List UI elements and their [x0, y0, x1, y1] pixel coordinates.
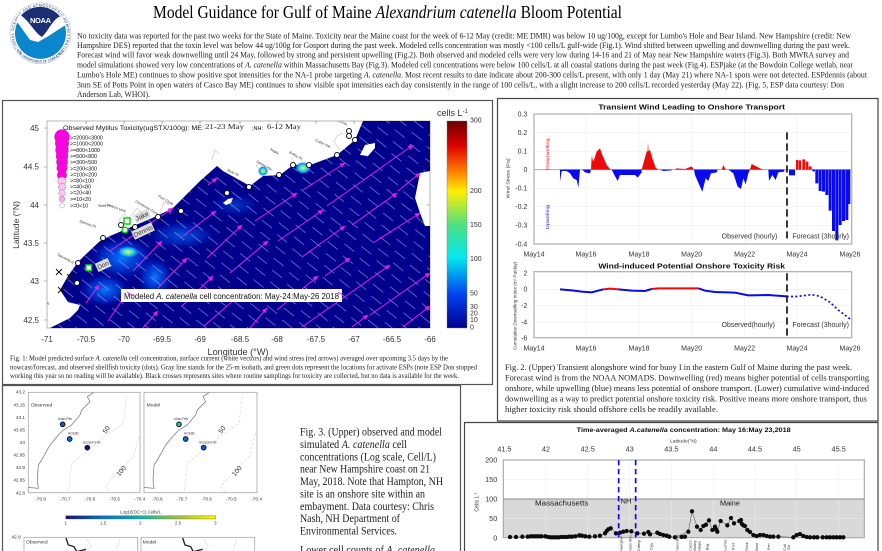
station labels: Gleason Cove	[326, 113, 348, 127]
chart: cumulative toxicity risk: May22	[734, 346, 755, 353]
routine sampling crosses	[56, 269, 73, 293]
legend: mussel toxicity: >=500<800	[70, 154, 97, 160]
lower maps: Model	[143, 539, 156, 545]
log colorbar: 2.5	[175, 520, 182, 525]
y axis labels	[485, 455, 497, 542]
station names: Kittery	[637, 540, 641, 551]
station names	[620, 535, 791, 551]
latitude axis labels: 44.5	[23, 162, 40, 172]
chart: wind stress: Upwelling	[545, 205, 551, 229]
New Hampshire bounds	[619, 460, 636, 538]
figure 1 caption: Fig. 1: Model predicted surface A. catenella cell concentration, surface current (white vectors) and wind stress (red arrows) averaged over upcoming 3.5 days by the	[10, 354, 449, 362]
y axis labels: 50	[489, 514, 497, 523]
chart: wind stress: -0.4	[515, 241, 527, 248]
station names: Lumbo	[724, 539, 728, 551]
log colorbar: 3	[214, 520, 217, 525]
latitude axis: 42	[542, 445, 550, 454]
legend: mussel toxicity: Observed Mytilus Toxicity(ugSTX/100g): ME:	[63, 125, 204, 132]
latitude axis: 44	[709, 445, 717, 454]
map: model: 100	[231, 465, 244, 478]
station labels: Naple	[270, 147, 280, 156]
map axis labels: -70.7	[60, 496, 71, 501]
text block: summary: Hampshire DES) reported that the toxin level was below 44 ug/100g for Gosport during the past week. Modeled cells concentration was mostly <100 cells/L gulf-wide (Fig.1). Wind shifted between upwelling and downwelling during the past week.	[77, 41, 850, 50]
station line	[510, 511, 843, 537]
panel: time-averaged concentration by latitude: Cells L	[474, 495, 480, 512]
risk line: forecast	[787, 295, 850, 319]
ESP sites	[86, 218, 130, 270]
chart: cumulative toxicity risk: Cumulative Downwelling Index (m² Pa/day)	[512, 261, 517, 350]
y axis labels: 0	[493, 533, 497, 542]
station names: Isles Shls	[628, 535, 632, 551]
latitude axis labels: 44	[30, 201, 40, 210]
latitude axis: 45.5	[832, 445, 846, 454]
text block: summary	[77, 32, 868, 99]
state labels: Massachusetts	[535, 499, 589, 508]
risk line: blue segments	[560, 288, 787, 296]
figure 3 caption: simulated A. catenella cell	[300, 437, 408, 451]
figure 2 caption: Forecast wind is from the NOAA NOMADS. Downwelling (red) means higher potential of cells transporting	[505, 372, 870, 382]
chart: cumulative toxicity risk: May18	[629, 346, 650, 353]
longitude axis labels: -71	[41, 335, 53, 344]
station names: Bay	[706, 544, 710, 550]
chart: wind stress: Forecast (3hourly)	[792, 234, 849, 241]
station names: Saco Bay	[675, 535, 679, 551]
current vectors	[50, 121, 430, 328]
map: model: Lilian Pier	[174, 417, 189, 421]
chart: wind stress: May20	[681, 251, 702, 258]
longitude axis labels: -68	[271, 335, 283, 344]
map axis labels: 43	[20, 440, 25, 445]
map annotation: modeled concentration	[121, 289, 344, 302]
longitude axis labels: -70.5	[77, 335, 96, 344]
text block: summary: Forecast wind will favor weak downwelling until 24 May, followed by strong and persistent upwelling (Fig.2). Both observed and modeled cells were very low during 14-16 and 21 of May near New Hampshire waters (Fig.3). Both MWRA survey and	[77, 50, 849, 60]
logo ring text: NATIONAL OCEANIC AND ATMOSPHERIC ADMINISTRATION	[11, 4, 70, 56]
figure 3 caption	[300, 424, 443, 551]
chart: wind stress: Observed (hourly)	[722, 234, 777, 241]
map axis labels: 42.8	[16, 490, 25, 495]
station names: Ga	[787, 544, 791, 550]
longitude axis labels: -70	[118, 335, 130, 344]
chart: wind stress	[506, 102, 861, 258]
station names: Casco	[688, 540, 692, 551]
map axis labels: -70.8	[35, 496, 46, 501]
text block: summary: No toxicity data was reported for the past two weeks for the State of Maine. Toxicity near the Maine coast for the week of 6-12 May (credit: ME DMR) was below 10 ug/100g, except for Lumbo's Hole and Bear Island. New Hampshire (credit: New	[77, 32, 851, 40]
map: model: Gosport Hbr	[199, 440, 218, 444]
chart: wind stress: May24	[787, 251, 808, 258]
map: observed: 50	[102, 425, 112, 435]
map axis labels: -70.4	[251, 496, 262, 501]
legend: mussel toxicity: 21-23 May	[205, 122, 244, 131]
ESP name tags: Jake	[135, 210, 150, 223]
station labels: Christmas Cove	[134, 199, 159, 216]
y axis labels: 100	[485, 494, 497, 503]
upwelling bars	[560, 170, 850, 240]
colorbar: 0	[470, 324, 474, 332]
y axis labels: 150	[485, 475, 497, 484]
map axis labels: -70.5	[226, 496, 237, 501]
panel: time-averaged concentration by latitude: -1	[474, 492, 478, 495]
figure 1 caption: working this year so no reading will be available). Black crosses represents sites where routine samplings for toxicity are collected, but no data is available for the week.	[10, 371, 459, 380]
station names: Hampton	[620, 536, 624, 551]
map axis labels: 43.05	[13, 427, 25, 432]
chart: cumulative toxicity risk: May16	[576, 346, 597, 353]
map: observed: ACE80	[68, 432, 79, 436]
legend: mussel toxicity: >=2000<3000	[70, 136, 103, 142]
state labels	[535, 496, 740, 508]
chart title: Time-averaged A.catenella concentration: May 16:May 23,2018	[577, 427, 791, 434]
map: model: Model	[147, 403, 160, 409]
chart: wind stress: 0.2	[518, 130, 527, 137]
text block: summary: Anderson Lab, WHOI).	[77, 90, 150, 99]
station labels: Cutler Har.	[315, 138, 332, 149]
figure 3 caption: Environmental Services.	[300, 524, 397, 538]
station labels: Lumbo's Hole	[105, 202, 127, 213]
station labels: Ganes Hbr.	[256, 159, 273, 172]
text block: summary: Lumbo's Hole ME) continues to show positive spot intensities for the NA-1 probe targeting A. catenella. Most recent results to date indicate about 200-300 cells/L present, with only 1 day (May 21) where NA-1 spots were not detected. ESPdennis (about	[77, 70, 868, 80]
legend: mussel toxicity: >=20<40	[70, 190, 91, 196]
colorbar: 200	[470, 188, 482, 195]
map: model: ACE80	[184, 432, 195, 436]
panel: time-averaged concentration by latitude	[464, 422, 878, 551]
legend: mussel toxicity: >=0<10	[70, 204, 88, 210]
figure 1 caption	[10, 354, 477, 380]
map: model: 50	[218, 425, 228, 435]
colorbar: 30	[470, 304, 478, 311]
map axis labels: 43.2	[16, 390, 25, 395]
coastline detail	[118, 133, 343, 222]
figure 2 caption: onshore, while upwelling (blue) means less potential of onshore transport. (Lower) cumulative wind-induced	[505, 383, 870, 393]
map: observed: 100	[116, 465, 128, 478]
longitude axis labels: Longitude (°W)	[208, 347, 268, 357]
ESP name tags	[95, 209, 155, 272]
station labels: Spurwink R.	[56, 252, 75, 266]
map axis labels: -70.7	[177, 496, 188, 501]
station names: Pen	[767, 543, 771, 550]
longitude axis labels: -69.5	[153, 335, 172, 344]
logo white bird	[16, 14, 66, 42]
cell concentration blobs	[79, 162, 311, 307]
panel frame	[464, 422, 878, 551]
chart: wind stress: May14	[524, 251, 545, 258]
log colorbar: Log10(OC+1) Cells/L	[120, 509, 162, 514]
latitude axis labels: 42.5	[23, 316, 40, 325]
chart: wind stress: Transient Wind Leading to Onshore Transport	[598, 102, 785, 111]
ocean concentration field	[50, 121, 430, 328]
longitude axis labels: -66	[424, 335, 436, 344]
text block: summary: model simulations showed very low concentrations of A. catenella within Massachusetts Bay (Fig.3). Modeled cell concentrations were below 100 cells/L at all coastal stations during the past week (Fig.4). ESPjake (at the Bowdoin College wetlab, near	[77, 60, 853, 70]
legend: mussel toxicity: ;NH:	[252, 126, 263, 132]
station names: Cutl	[783, 544, 787, 551]
chart: wind stress: 0.1	[518, 149, 527, 156]
longitude axis labels	[41, 335, 436, 357]
figure 2 caption: higher toxicity risk should offshore cells be readily available.	[505, 404, 718, 414]
chart: wind stress: May22	[734, 251, 755, 258]
chart: cumulative toxicity risk: Wind-induced Potential Onshore Toxicity Risk	[598, 261, 786, 270]
colorbar: 10	[470, 317, 478, 324]
colorbar: cells L	[437, 108, 463, 118]
latitude axis labels: 43.5	[23, 239, 40, 248]
legend: mussel toxicity: >=1000<2000	[70, 142, 103, 148]
lower maps: Observed	[26, 539, 48, 545]
map axis labels: 43.1	[16, 415, 25, 420]
legend: mussel toxicity: >=300<500	[70, 160, 97, 166]
chart: cumulative toxicity risk: May20	[681, 346, 702, 353]
latitude axis: 41.5	[497, 445, 511, 454]
map axis labels: 42.85	[13, 478, 25, 483]
map axis labels: 42.95	[13, 453, 25, 458]
figure 1 caption: nowcast/forecast, and observed shellfish toxicity (dots). Gray line stands for the 25-m isobath, and green dots represent the locations for activate ESPs (note ESP Don stopped	[10, 362, 477, 372]
chart: cumulative toxicity risk: Observed(hourly)	[722, 322, 775, 329]
chart: wind stress: -0.2	[515, 204, 527, 211]
chart: wind stress: 0.3	[518, 111, 527, 118]
panel: surface cell concentration map	[2, 100, 492, 384]
chart: cumulative toxicity risk: -6	[521, 335, 527, 342]
map axis labels: -70.6	[201, 496, 212, 501]
station labels: Spinney Pt.	[79, 219, 97, 229]
legend: mussel toxicity: >=100<200	[70, 172, 97, 178]
state labels: Maine	[720, 499, 740, 508]
station labels: Ipswich	[38, 297, 50, 306]
panel: New Hampshire observed vs model	[2, 386, 460, 551]
longitude axis labels: -66.5	[383, 335, 402, 344]
legend: mussel toxicity	[54, 122, 301, 210]
latitude axis labels	[11, 124, 40, 325]
logo ring lower text: U.S. DEPARTMENT OF COMMERCE	[18, 50, 64, 63]
figure 3 caption: Fig. 3. (Upper) observed and model	[300, 424, 443, 438]
figure 2 caption	[505, 362, 870, 414]
logo wordmark: NOAA	[30, 16, 52, 25]
chart: cumulative toxicity risk: May14	[524, 346, 545, 353]
log colorbar: 1.5	[100, 520, 107, 525]
map water and overlays	[38, 113, 430, 328]
colorbar: 300	[470, 118, 482, 124]
longitude axis labels: -67.5	[307, 335, 326, 344]
latitude axis: Latitude(°N)	[670, 439, 697, 445]
log colorbar: 1	[64, 520, 67, 525]
chart: wind stress: Wind Stress (Pa)	[506, 158, 511, 198]
lower maps	[12, 535, 255, 551]
colorbar: 20	[470, 310, 478, 318]
lower maps: 42.8	[12, 535, 21, 540]
risk line: red segments	[603, 288, 698, 289]
colorbar	[437, 108, 482, 332]
ESP name tags: Don	[96, 260, 111, 271]
latitude axis: 43.5	[664, 445, 678, 454]
colorbar: -1	[463, 109, 469, 115]
station labels: Stein Pt.	[98, 204, 112, 208]
map axis labels: 42.9	[16, 465, 25, 470]
station names: Bear	[755, 542, 759, 551]
figure 3 caption: Nash, NH Department of	[300, 511, 400, 525]
chart: wind stress: -0.1	[515, 186, 527, 193]
longitude axis labels: -68.5	[231, 335, 250, 344]
chart: cumulative toxicity risk: May24	[787, 346, 808, 353]
figure 2 caption: Fig. 2. (Upper) Transient alongshore wind for buoy I in the eastern Gulf of Maine during the past week.	[505, 362, 852, 372]
station labels: Port Clyde	[158, 194, 174, 206]
station dots	[510, 511, 843, 537]
legend: mussel toxicity: >=800<1000	[70, 148, 100, 154]
latitude axis labels: 43	[30, 277, 40, 286]
legend: mussel toxicity: >=200<300	[70, 166, 97, 172]
map axis labels	[13, 390, 262, 501]
latitude axis: 43	[626, 445, 634, 454]
station labels: Bear Isl.	[227, 168, 240, 177]
legend: mussel toxicity: 6-12 May	[267, 122, 301, 131]
panel frame	[2, 100, 492, 384]
figure 2 caption: downwelling as a way to predict potential onshore toxicity risk. Positive means more onshore transport, thus	[505, 394, 867, 404]
chart: cumulative toxicity risk: 0	[523, 287, 527, 294]
legend: mussel toxicity: >=40<80	[70, 184, 91, 190]
chart: cumulative toxicity risk: Forecast (3hourly)	[792, 322, 849, 329]
latitude axis: 44.5	[748, 445, 762, 454]
map axis labels: -70.8	[152, 496, 163, 501]
logo navy sky	[21, 7, 60, 37]
chart: wind stress: 0	[523, 167, 527, 174]
latitude axis labels: Latitude (°N)	[11, 201, 21, 249]
log colorbar	[64, 509, 217, 525]
figure 3 caption: near New Hampshire coast on 21	[300, 462, 430, 476]
chart: cumulative toxicity risk: -2	[521, 303, 527, 310]
map: observed	[28, 392, 140, 493]
legend: mussel toxicity: >=80<100	[70, 178, 94, 184]
downwelling bars	[591, 148, 812, 170]
chart: wind stress: May16	[576, 251, 597, 258]
map: observed: Gosport Hbr	[83, 440, 102, 444]
figure 3 caption: embayment. Data courtesy: Chris	[300, 499, 434, 513]
longitude axis labels: -69	[194, 335, 206, 344]
icon: NOAA logo	[10, 2, 72, 64]
station names: Bailey	[693, 541, 697, 551]
latitude axis	[497, 439, 846, 454]
ESP name tags: Dennis	[133, 224, 155, 239]
colorbar: 150	[470, 222, 482, 229]
station labels	[38, 113, 348, 306]
latitude axis: 42.5	[581, 445, 595, 454]
map: model	[144, 392, 257, 493]
map axis labels: -70.6	[85, 496, 96, 501]
map: observed: Observed	[31, 403, 53, 409]
station names: Port	[732, 543, 736, 550]
figure 3 caption: May, 2018. Note that Hampton, NH	[300, 474, 443, 488]
chart: cumulative toxicity risk: -4	[521, 319, 527, 326]
chart: cumulative toxicity risk	[512, 261, 861, 353]
state labels: NH	[621, 496, 631, 505]
chart: wind stress: May26	[840, 251, 861, 258]
legend: mussel toxicity: >=10<20	[70, 197, 91, 203]
panel frame	[498, 98, 878, 421]
threshold band	[503, 499, 864, 538]
chart: wind stress: May18	[629, 251, 650, 258]
station names: Rock	[745, 542, 749, 551]
map axis labels: -70.4	[135, 496, 146, 501]
logo disc	[15, 8, 66, 59]
map: observed: Lilian Pier	[58, 417, 73, 421]
chart: wind stress: Downwelling	[545, 138, 551, 170]
station names: Ogq	[649, 543, 653, 550]
title: Model Guidance for Gulf of Maine Alexandrium catenella Bloom Potential	[153, 2, 622, 22]
figure 3 caption: concentrations (Log scale, Cell/L)	[300, 450, 436, 464]
forecast divider	[784, 273, 789, 338]
chart: cumulative toxicity risk: 2	[523, 271, 527, 278]
toxicity dots	[74, 128, 358, 286]
chart: cumulative toxicity risk: May26	[840, 346, 861, 353]
station names: Harps	[698, 541, 702, 551]
station labels: Kelley Pt.	[288, 150, 304, 161]
text block: summary: 3nm SE of Potts Point in open waters of Casco Bay ME) continues to show visible spot intensities each day consistently in the range of 100 cells/L, with a slight increase to 200 cells/L recorded yesterday (May 22). (Fig. 5, ESP data courtesy: Don	[77, 80, 844, 90]
map axes	[44, 121, 430, 328]
map axis labels: -70.5	[109, 496, 120, 501]
figure 3 caption: site is an onshore site within an	[300, 486, 425, 500]
wind stress arrows	[86, 145, 430, 328]
latitude axis: 45	[793, 445, 801, 454]
log colorbar: 2	[139, 520, 142, 525]
map annotation: modeled concentration: Modeled A. catenella cell concentration: May-24:May-26 2018	[124, 292, 340, 301]
panel: wind and toxicity risk	[498, 98, 878, 421]
longitude axis labels: -67	[348, 335, 360, 344]
panel frame	[2, 386, 460, 551]
islands	[360, 143, 375, 156]
latitude axis labels: 45	[30, 124, 40, 133]
y axis labels: 200	[485, 455, 497, 464]
map axis labels: 43.15	[13, 403, 25, 408]
forecast divider	[784, 132, 789, 238]
colorbar: 100	[470, 256, 482, 263]
chart: wind stress: -0.3	[515, 223, 527, 230]
colorbar: 50	[470, 290, 478, 298]
